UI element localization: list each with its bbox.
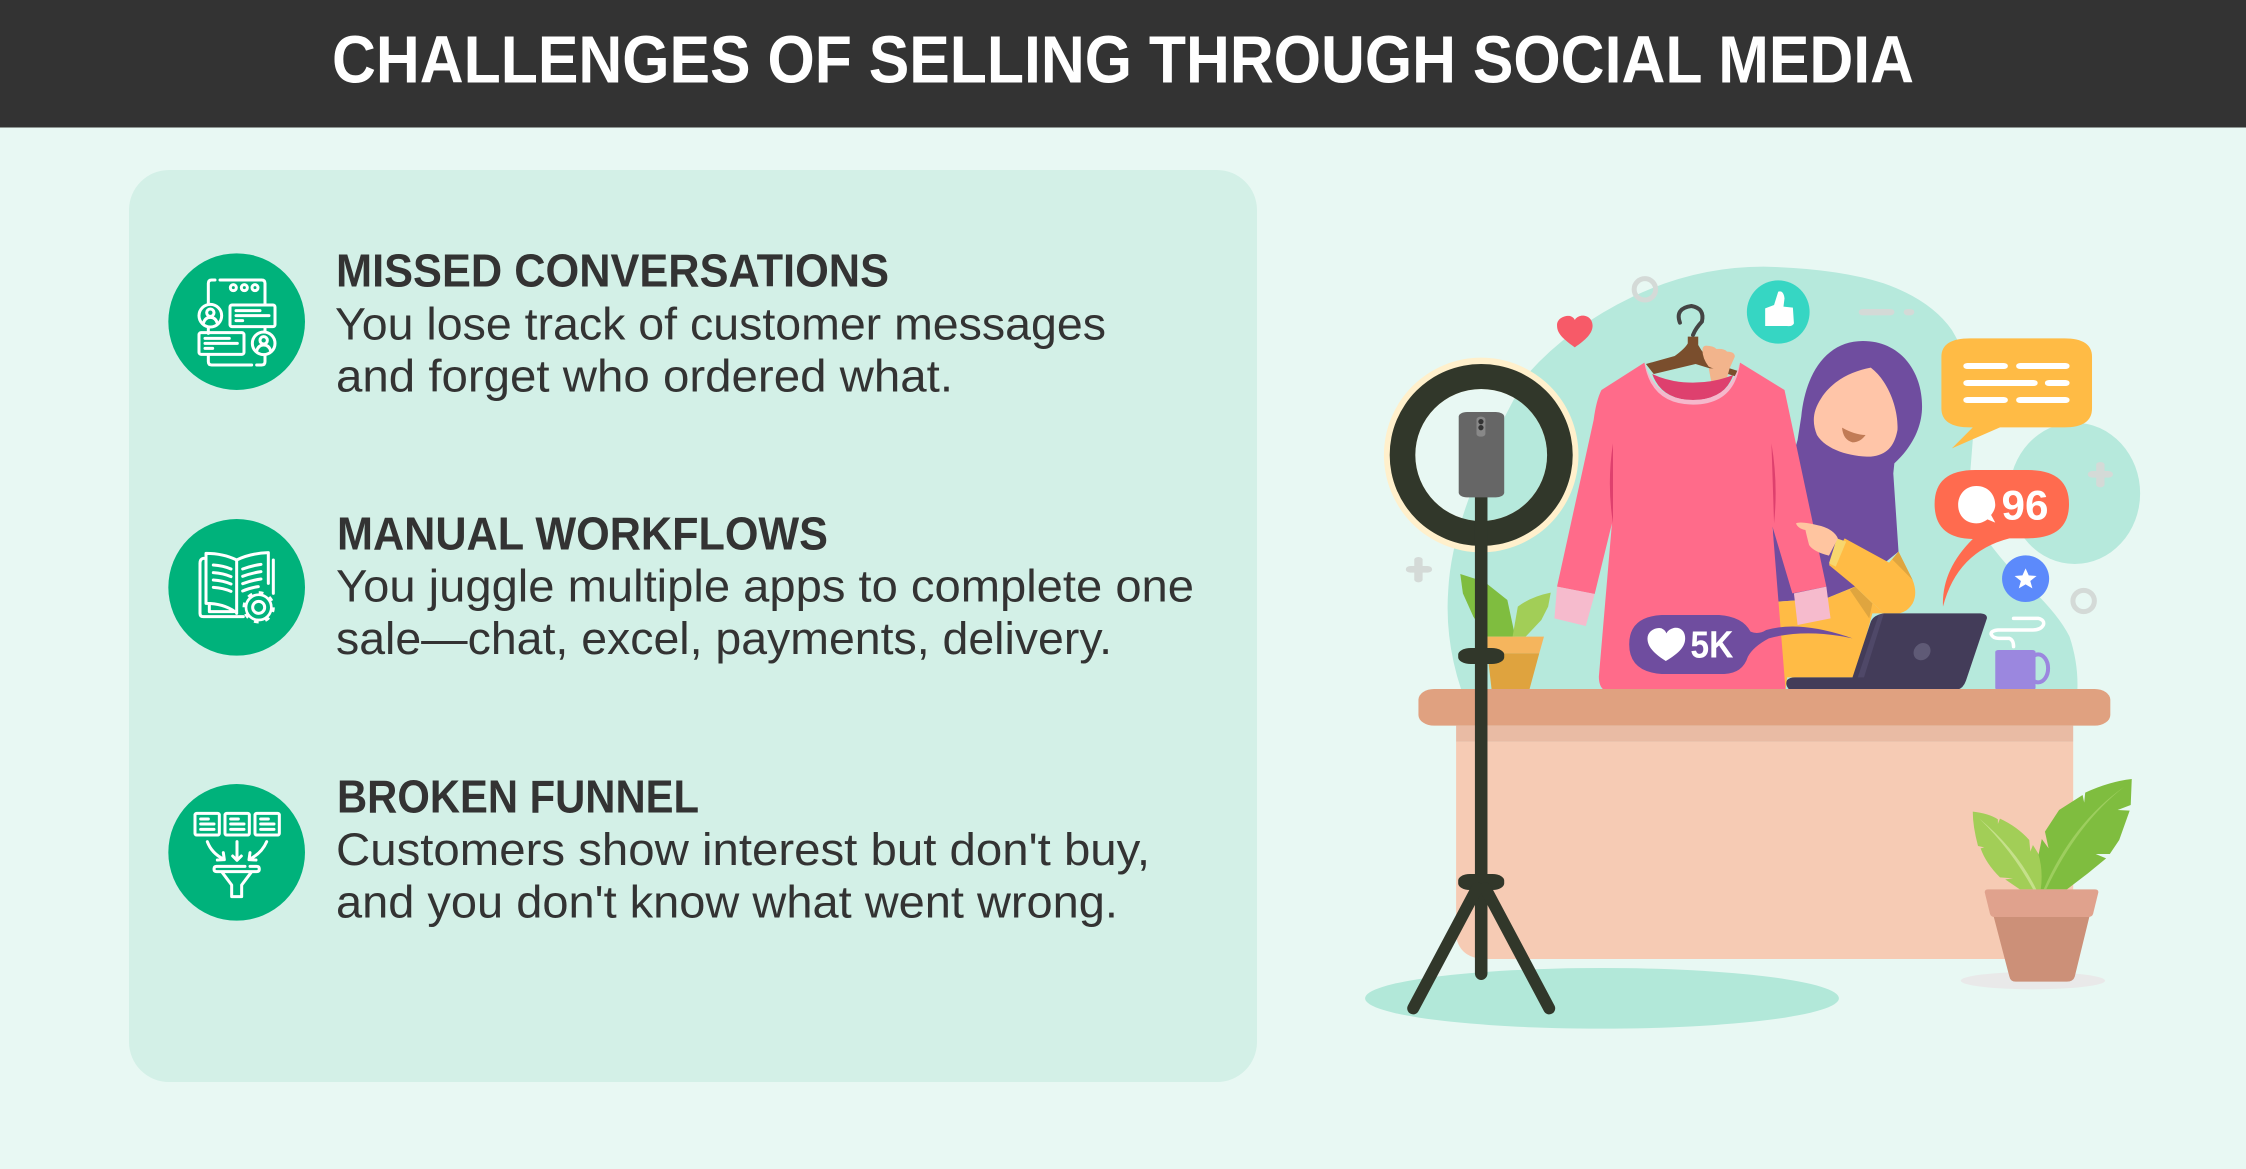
background blob xyxy=(1448,267,2140,690)
description: and forget who ordered what. xyxy=(336,351,953,402)
comment count bubble: 96 xyxy=(2002,481,2049,528)
comment count bubble xyxy=(1935,470,2069,607)
icon: funnel xyxy=(168,784,305,921)
description: sale—chat, excel, payments, delivery. xyxy=(336,613,1112,664)
purple likes bubble xyxy=(1629,615,1853,674)
pink shirt on hanger xyxy=(1554,306,1831,690)
heading: MISSED CONVERSATIONS xyxy=(336,245,889,297)
icon: chat window xyxy=(168,253,305,390)
description xyxy=(336,824,1150,927)
heading: BROKEN FUNNEL xyxy=(337,771,699,823)
plant shadow xyxy=(1961,972,2105,989)
icon: red heart xyxy=(1557,316,1593,347)
header banner xyxy=(0,0,2246,128)
large potted plant xyxy=(1973,779,2132,982)
woman's body xyxy=(1772,341,1922,690)
table xyxy=(1418,689,2110,959)
decorative grey marks xyxy=(1406,279,2113,612)
illustration: woman selling on social media xyxy=(1365,267,2140,1029)
icon: star badge xyxy=(2002,555,2049,602)
yellow chat bubble xyxy=(1941,338,2092,448)
title: CHALLENGES OF SELLING THROUGH SOCIAL MEDIA xyxy=(332,23,1914,98)
ring light on tripod xyxy=(1384,358,1578,1008)
item: missed conversations xyxy=(168,245,1106,402)
heading: MANUAL WORKFLOWS xyxy=(337,507,828,559)
item: manual workflows xyxy=(168,507,1194,664)
icon: thumbs up xyxy=(1747,280,1810,344)
panel: challenges xyxy=(129,170,1257,1082)
woman's arm and pointing hand xyxy=(1796,522,1915,618)
icon: book and gear xyxy=(168,519,305,656)
description xyxy=(336,561,1194,664)
laptop xyxy=(1786,613,1987,690)
item: broken funnel xyxy=(168,771,1150,927)
description xyxy=(335,298,1106,402)
description: You lose track of customer messages xyxy=(335,298,1106,349)
description: and you don't know what went wrong. xyxy=(336,876,1118,927)
small potted plant xyxy=(1460,574,1551,690)
description: You juggle multiple apps to complete one xyxy=(336,561,1194,612)
coffee mug xyxy=(1991,618,2048,690)
description: Customers show interest but don't buy, xyxy=(336,824,1150,875)
purple likes bubble: 5K xyxy=(1690,624,1734,666)
floor shadow xyxy=(1365,968,1839,1029)
